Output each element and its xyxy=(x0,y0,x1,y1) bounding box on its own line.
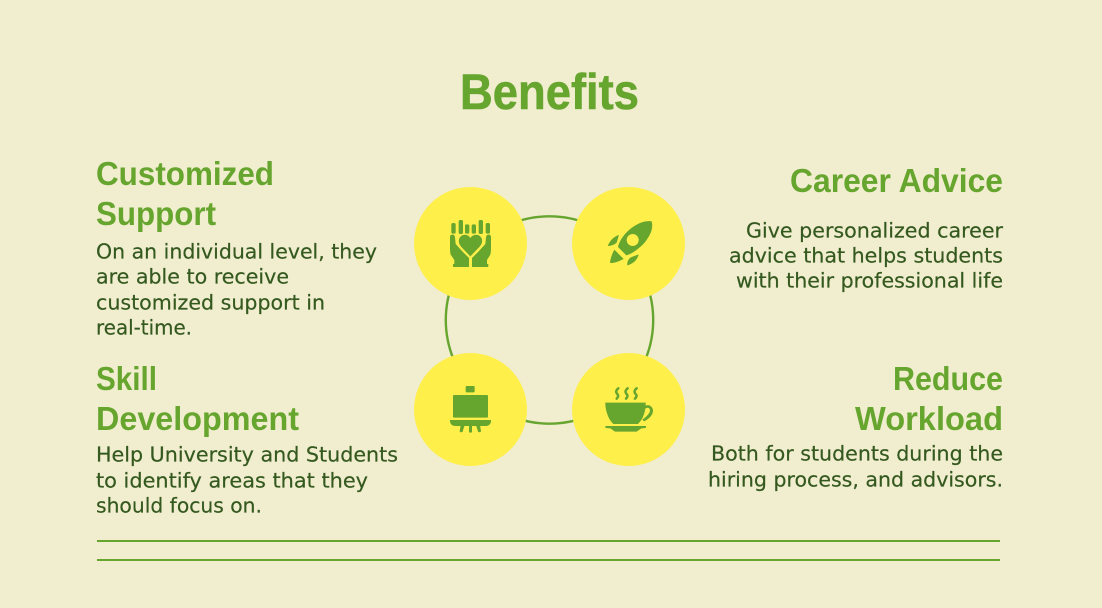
heading: skill development xyxy=(96,360,299,437)
text block: career advice: advice that helps students xyxy=(729,244,1003,268)
heading: reduce workload: Workload xyxy=(855,400,1003,437)
icon circle: coffee cup xyxy=(572,353,685,466)
heading: customized support: Support xyxy=(96,195,216,232)
heading: reduce workload: Reduce xyxy=(893,360,1003,397)
text block: career advice xyxy=(729,218,1004,292)
text block: customized support: are able to receive xyxy=(96,264,289,288)
text block: customized support xyxy=(96,240,377,340)
panel: reduce workload xyxy=(708,360,1003,492)
title: Benefits xyxy=(460,64,639,120)
icon circle: presentation board xyxy=(414,353,527,466)
text block: reduce workload: Both for students during the xyxy=(711,442,1003,466)
heading: career advice: Career Advice xyxy=(790,162,1003,199)
text block: skill development: to identify areas that they xyxy=(96,468,368,492)
icon circle: hands with heart xyxy=(414,187,527,300)
text block: customized support: customized support in xyxy=(96,290,325,314)
heading: skill development: Skill xyxy=(96,360,157,397)
text block: customized support: On an individual level, they xyxy=(96,240,377,264)
heading: skill development: Development xyxy=(96,400,299,437)
text block: customized support: real-time. xyxy=(96,316,192,340)
ring connector xyxy=(446,216,653,424)
icon circle: rocket xyxy=(572,187,685,300)
panel: customized support xyxy=(96,155,377,340)
text block: reduce workload xyxy=(708,442,1003,492)
heading: reduce workload xyxy=(855,360,1003,437)
text block: skill development: should focus on. xyxy=(96,494,262,518)
heading: customized support xyxy=(96,155,274,232)
panel: career advice xyxy=(729,162,1004,292)
panel: skill development xyxy=(96,360,398,518)
text block: skill development xyxy=(96,442,398,518)
text block: skill development: Help University and Students xyxy=(96,442,398,466)
text block: reduce workload: hiring process, and advisors. xyxy=(708,468,1003,492)
heading: customized support: Customized xyxy=(96,155,274,192)
text block: career advice: with their professional life xyxy=(736,268,1003,292)
footer rules xyxy=(97,541,1000,560)
text block: career advice: Give personalized career xyxy=(746,218,1004,242)
